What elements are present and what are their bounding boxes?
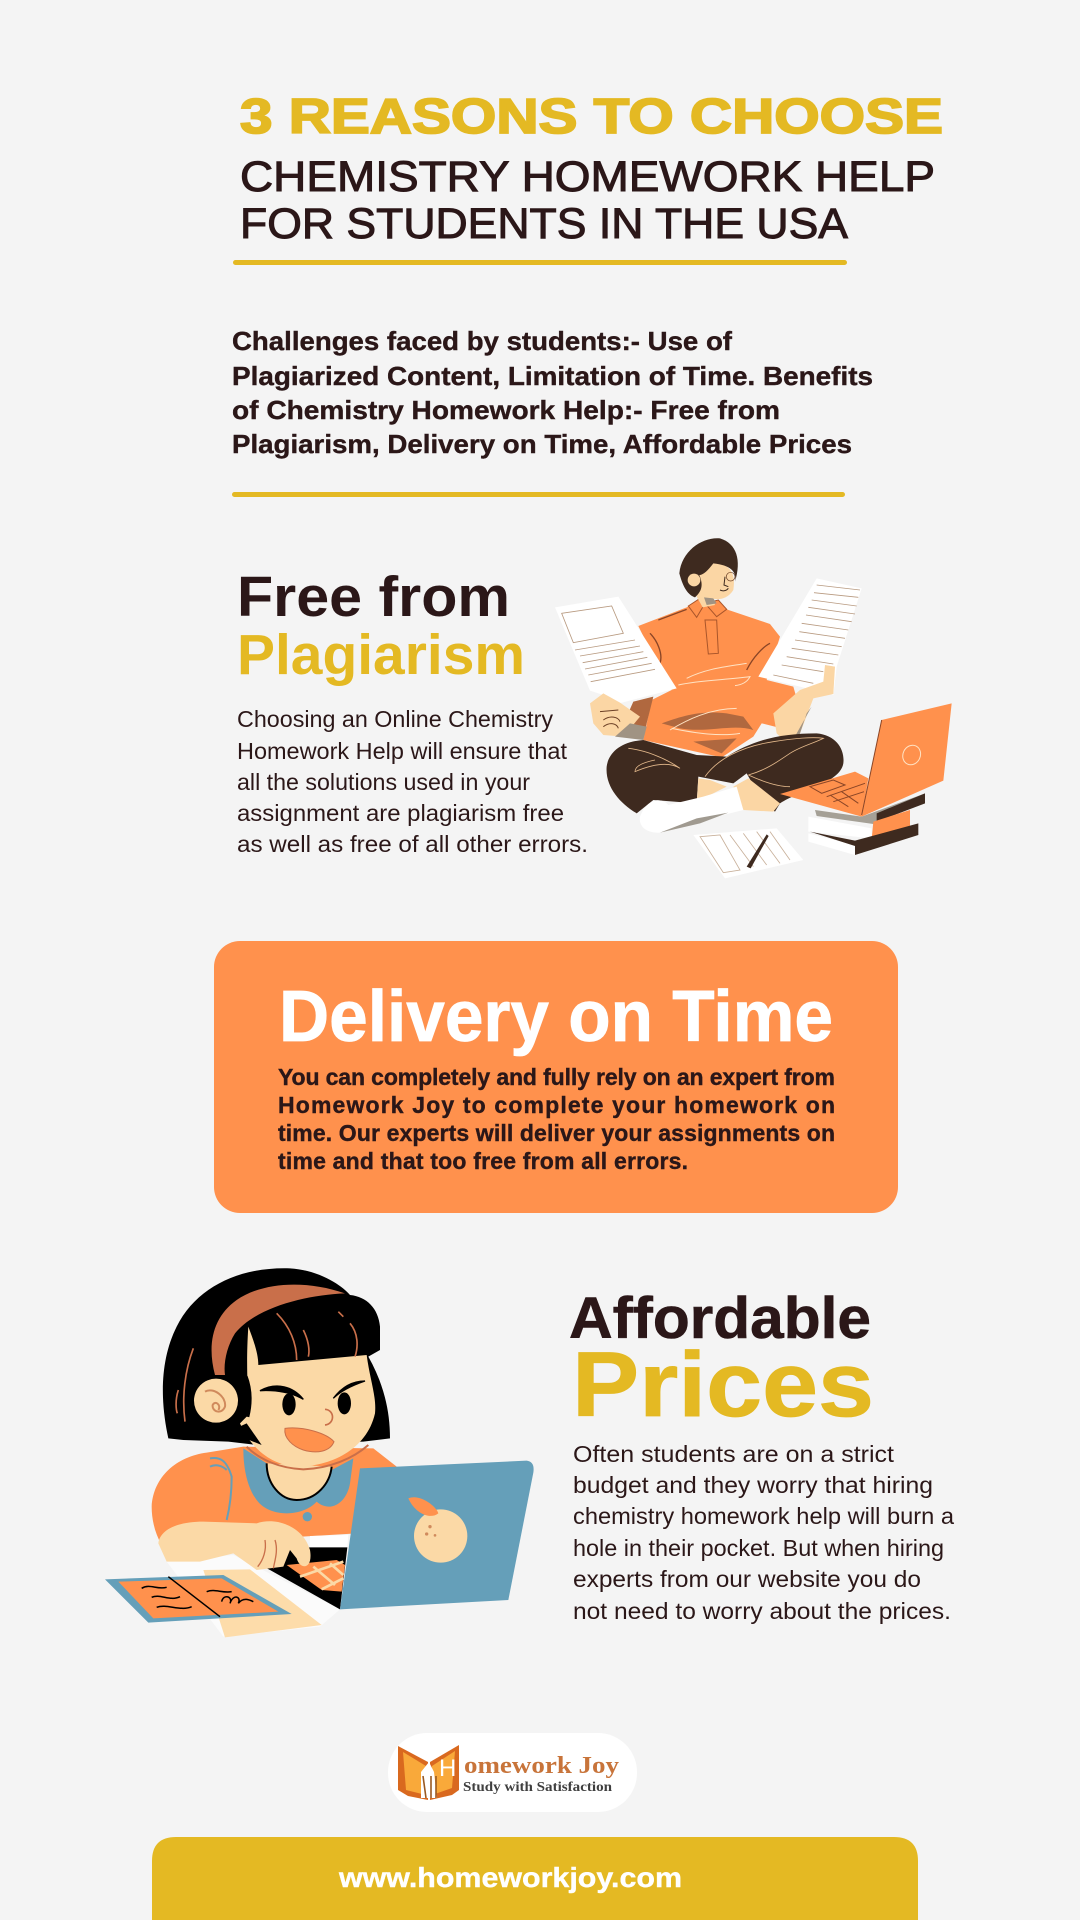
panel: delivery on time (214, 941, 898, 1213)
text: prices body: experts from our website you do (573, 1566, 921, 1592)
mouth (285, 1428, 334, 1452)
hands (590, 693, 640, 737)
section: affordable prices (105, 1268, 954, 1637)
eyes and brows (282, 1393, 296, 1415)
text: delivery body: time and that too free from all errors. (278, 1148, 688, 1174)
pad and keyboard (167, 1555, 340, 1637)
section: free from plagiarism (237, 538, 952, 878)
trousers (607, 733, 844, 813)
text: delivery body (278, 1064, 835, 1174)
text: prices body: chemistry homework help will burn a (573, 1503, 954, 1529)
text: prices body: budget and they worry that hiring (573, 1472, 933, 1498)
text: plagiarism body: Homework Help will ensure that (237, 738, 568, 764)
collar (243, 1448, 353, 1513)
title: FOR STUDENTS IN THE USA (240, 200, 848, 248)
illustration: student with papers and laptop (555, 538, 952, 878)
icon: book with pencil: H (439, 1755, 456, 1782)
intro paragraph (232, 326, 873, 459)
heading: affordable prices (569, 1286, 874, 1436)
text: plagiarism body: as well as free of all other errors. (237, 831, 588, 857)
hair strands (176, 1312, 357, 1422)
laptop (340, 1461, 534, 1609)
intro paragraph: Plagiarism, Delivery on Time, Affordable Prices (232, 429, 852, 459)
face and hair (697, 563, 734, 607)
cream paper (203, 1569, 322, 1637)
text: delivery body: time. Our experts will deliver your assignments on (278, 1120, 835, 1146)
text: plagiarism body: assignment are plagiarism free (237, 800, 564, 826)
illustration: girl with laptop (105, 1268, 534, 1637)
heading: affordable prices: Affordable (569, 1286, 871, 1351)
text: prices body: hole in their pocket. But when hiring (573, 1535, 944, 1561)
face (240, 1327, 375, 1467)
laptop and books (808, 817, 872, 838)
notebook (105, 1575, 292, 1623)
logo text (463, 1753, 619, 1795)
intro paragraph: Challenges faced by students:- Use of (232, 326, 732, 356)
text: delivery body: Homework Joy to complete your homework on (278, 1092, 835, 1118)
ear (194, 1379, 238, 1423)
text: plagiarism body: all the solutions used in your (237, 769, 530, 795)
text: prices body (573, 1441, 954, 1624)
right paper (758, 578, 862, 695)
footer url: www.homeworkjoy.com (338, 1862, 682, 1893)
text: prices body: Often students are on a strict (573, 1441, 895, 1467)
logo text: Study with Satisfaction (463, 1780, 612, 1795)
arm (158, 1521, 311, 1570)
text: prices body: not need to worry about the prices. (573, 1598, 951, 1624)
logo (388, 1733, 637, 1812)
intro paragraph: of Chemistry Homework Help:- Free from (232, 395, 780, 425)
legs and socks (697, 778, 727, 803)
text: plagiarism body: Choosing an Online Chemistry (237, 706, 553, 732)
title: 3 REASONS TO CHOOSE (240, 90, 943, 144)
left paper (555, 597, 677, 704)
intro paragraph: Plagiarized Content, Limitation of Time. Benefits (232, 361, 873, 391)
shirt (638, 598, 797, 757)
icon: book with pencil (398, 1745, 459, 1800)
headband (212, 1285, 345, 1375)
heading: delivery on time: Delivery on Time (279, 977, 833, 1057)
logo text: omework Joy (464, 1753, 619, 1779)
hair back (163, 1268, 390, 1445)
heading: affordable prices: Prices (572, 1334, 874, 1436)
text: delivery body: You can completely and fully rely on an expert from (278, 1064, 835, 1090)
heading: free from plagiarism (237, 565, 525, 687)
title (240, 90, 943, 248)
shirt (152, 1447, 397, 1545)
heading: free from plagiarism: Free from (237, 565, 510, 629)
paper and pen on floor (693, 828, 803, 878)
footer bar (152, 1837, 918, 1920)
text: plagiarism body (237, 706, 588, 857)
heading: free from plagiarism: Plagiarism (237, 623, 525, 687)
title: CHEMISTRY HOMEWORK HELP (240, 153, 935, 201)
